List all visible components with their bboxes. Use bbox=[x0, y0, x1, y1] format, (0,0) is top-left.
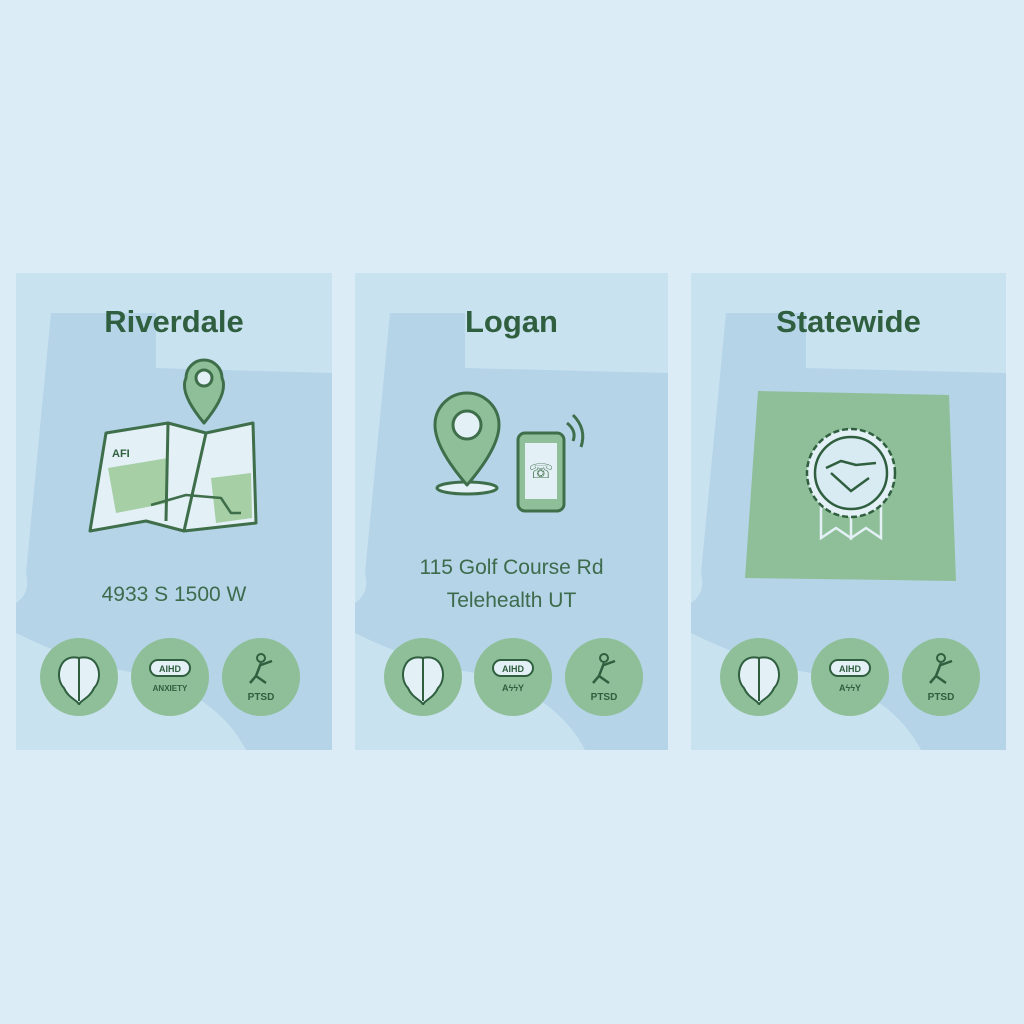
icon: folded map with pin: AFI bbox=[112, 448, 130, 460]
icon: state with badge bbox=[745, 391, 956, 581]
icons: conditions: AIHD bbox=[159, 664, 181, 674]
panel: Logan: Telehealth UT bbox=[447, 589, 576, 612]
icon: pin and phone: ☏ bbox=[528, 461, 554, 483]
icons: conditions: AIHD bbox=[502, 664, 524, 674]
icons: conditions: PTSD bbox=[248, 692, 274, 703]
icons: conditions: AIHD bbox=[839, 664, 861, 674]
icons: conditions bbox=[40, 638, 300, 716]
icons: conditions: AϟϟY bbox=[839, 683, 861, 693]
icons: conditions: PTSD bbox=[591, 692, 617, 703]
panel: Logan bbox=[355, 273, 668, 750]
icons: conditions bbox=[720, 638, 980, 716]
icon: pin and phone bbox=[434, 392, 584, 512]
panel: Riverdale bbox=[16, 273, 332, 750]
title: Logan bbox=[465, 304, 558, 339]
title: Riverdale bbox=[104, 304, 244, 339]
icons: conditions: PTSD bbox=[928, 692, 954, 703]
panel: Statewide bbox=[691, 273, 1006, 750]
address: 4933 S 1500 W bbox=[102, 583, 246, 606]
icons: conditions: ANXIETY bbox=[153, 684, 188, 693]
title: Statewide bbox=[776, 304, 921, 339]
address: 115 Golf Course Rd bbox=[419, 556, 604, 579]
icons: conditions: AϟϟY bbox=[502, 683, 524, 693]
icons: conditions bbox=[384, 638, 643, 716]
icon: folded map with pin bbox=[88, 358, 258, 532]
